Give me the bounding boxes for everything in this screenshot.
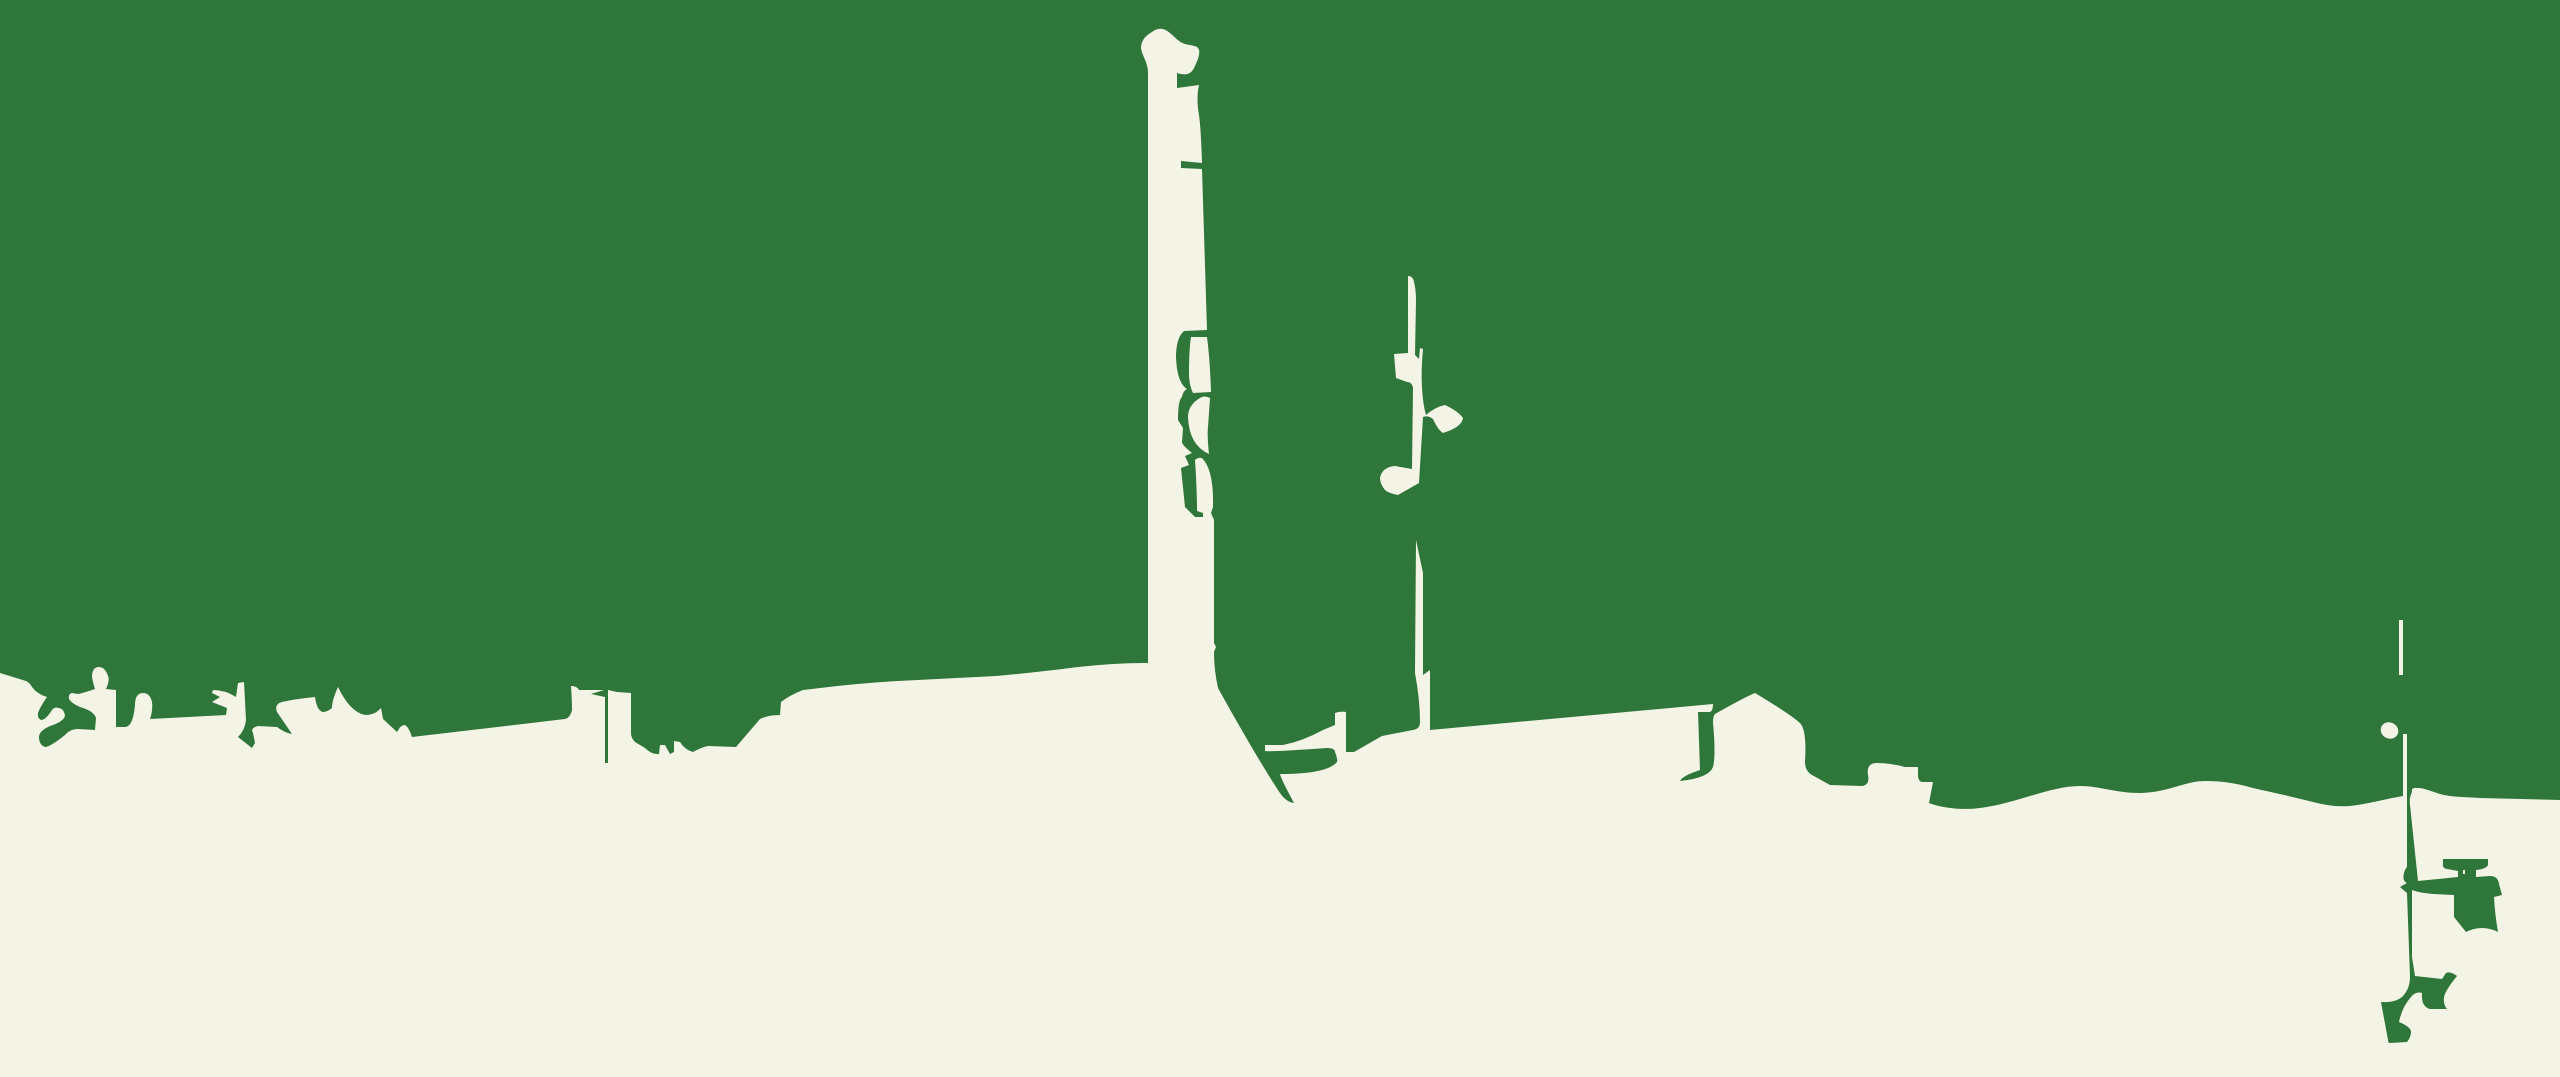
- icon: tiny speck on figure: [2463, 870, 2465, 874]
- icon: thin vertical bar: [2399, 620, 2403, 675]
- cut-out: upper cream panel in bracket: [1189, 337, 1211, 393]
- icon: small round ball: [2378, 719, 2401, 742]
- icon: musical-note shape: [1380, 276, 1463, 495]
- cut-out: lower cream panel in bracket: [1188, 396, 1210, 454]
